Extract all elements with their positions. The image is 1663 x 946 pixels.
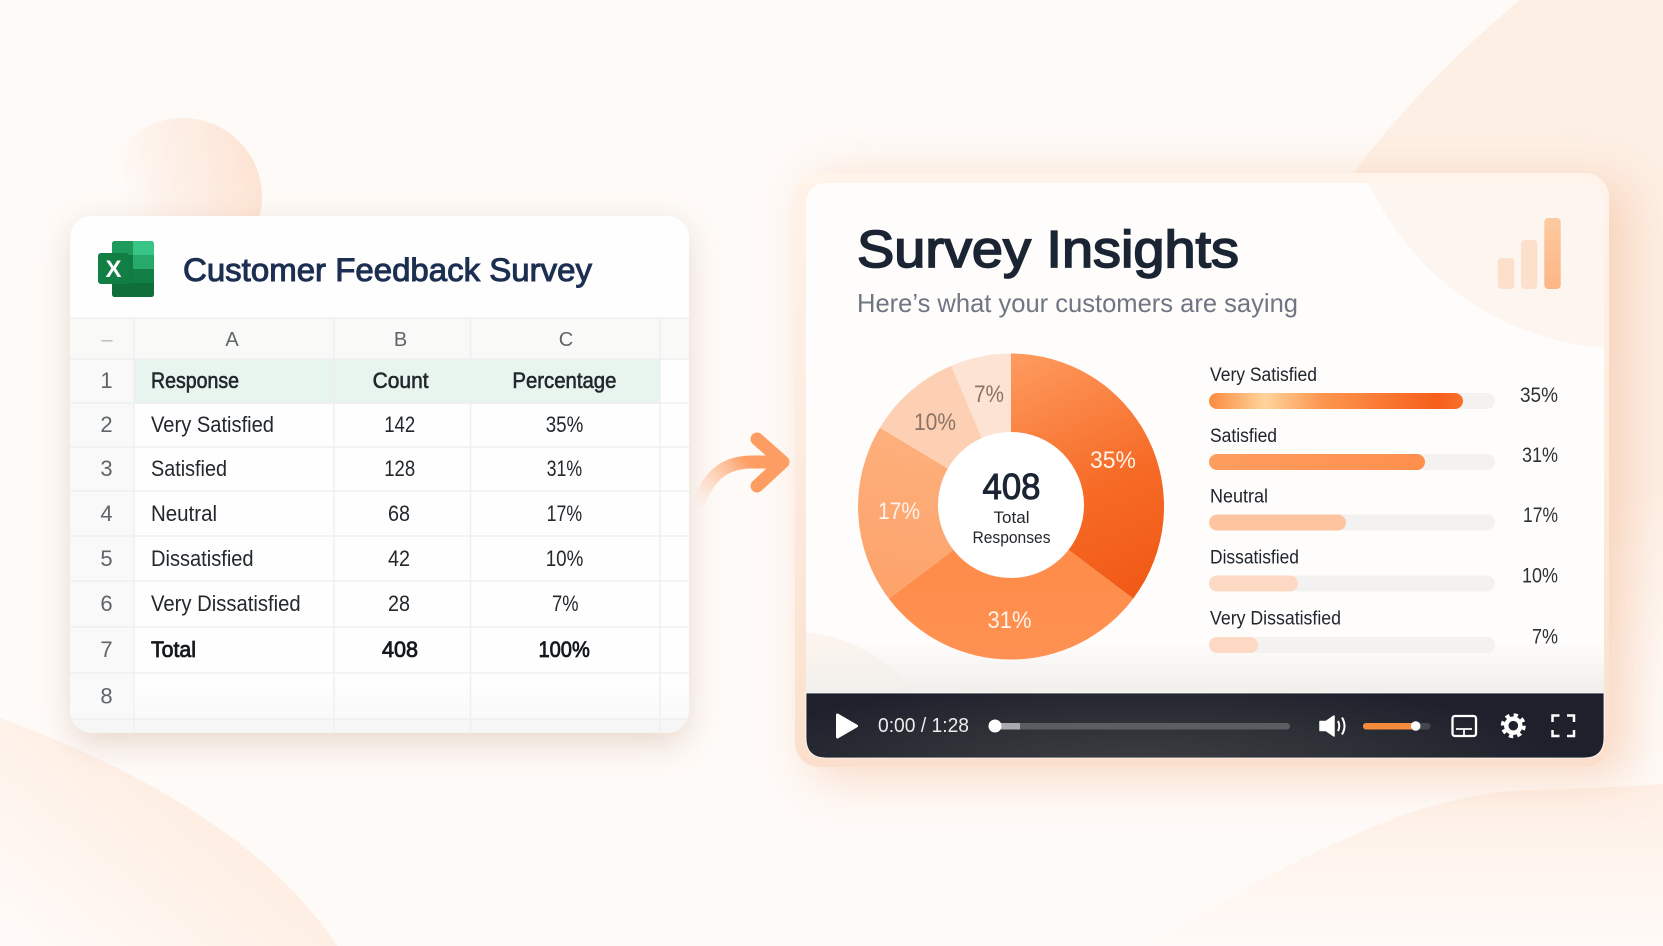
donut centre total: Total	[994, 508, 1030, 527]
row numbers: 3	[100, 456, 113, 481]
column letters: B	[394, 329, 407, 351]
table text: Total	[151, 637, 196, 662]
table text: 7%	[552, 591, 578, 616]
icon: fullscreen	[1552, 716, 1574, 736]
table text: Neutral	[151, 501, 217, 526]
row: Satisfied: 31%	[1522, 444, 1558, 467]
row numbers: 8	[100, 684, 113, 708]
row: Very Dissatisfied: Very Dissatisfied	[1210, 608, 1341, 630]
panel: spreadsheet card	[70, 216, 689, 743]
horizontal bar list	[1209, 365, 1558, 653]
panel: video player	[795, 173, 1630, 777]
row: Neutral: Neutral	[1210, 486, 1268, 508]
table text: Dissatisfied	[151, 546, 254, 571]
donut centre total	[972, 466, 1050, 547]
table grid	[70, 318, 689, 733]
row: Dissatisfied: Dissatisfied	[1210, 548, 1299, 568]
row numbers: 4	[100, 501, 113, 526]
row: Neutral: 17%	[1523, 504, 1558, 527]
icon: Excel logo	[98, 241, 154, 297]
table text: Very Dissatisfied	[151, 591, 301, 616]
table text: 10%	[546, 546, 583, 571]
icon: settings gear	[1503, 715, 1524, 736]
row numbers: 1	[100, 368, 113, 393]
column letters	[101, 329, 573, 351]
donut segment labels: 7%	[974, 381, 1004, 408]
table text: 100%	[538, 637, 590, 662]
row numbers: 5	[100, 546, 113, 571]
table text: 17%	[547, 501, 582, 526]
column letters: A	[225, 329, 239, 351]
row: Very Dissatisfied: 7%	[1532, 626, 1558, 648]
arrow	[697, 439, 783, 506]
table text: Satisfied	[151, 456, 227, 481]
donut segment labels	[878, 381, 1136, 634]
progress slider	[988, 720, 1290, 732]
row: Very Satisfied: Very Satisfied	[1210, 365, 1317, 386]
row: Very Satisfied: 35%	[1520, 384, 1558, 407]
donut chart	[858, 354, 1164, 660]
table text: Very Satisfied	[151, 412, 274, 437]
donut segment labels: 17%	[878, 498, 920, 525]
table text: Response	[151, 368, 239, 393]
table text: 68	[388, 501, 410, 526]
donut segment labels: 31%	[988, 607, 1032, 634]
donut segment labels: 10%	[914, 409, 956, 436]
table text: 31%	[547, 456, 582, 481]
icon: faded bar chart	[1498, 218, 1561, 289]
table text: 142	[384, 412, 415, 437]
row numbers: 7	[100, 637, 113, 662]
row: Satisfied: Satisfied	[1210, 426, 1277, 447]
row: Dissatisfied: 10%	[1522, 564, 1558, 588]
donut segment labels: 35%	[1090, 447, 1136, 474]
subtitle: Here’s what your customers are saying	[857, 288, 1298, 318]
heading: spreadsheet title: Customer Feedback Survey	[183, 252, 592, 288]
column letters: C	[559, 329, 573, 351]
row: Neutral	[1209, 486, 1558, 530]
table text: 42	[388, 546, 410, 571]
icon: theatre mode	[1452, 716, 1476, 736]
table text: 128	[384, 456, 415, 481]
row: Dissatisfied	[1209, 548, 1558, 592]
icon: volume	[1320, 716, 1344, 736]
heading: Survey Insights: Survey Insights	[857, 221, 1239, 279]
icon: Excel logo: X	[105, 256, 122, 283]
volume slider	[1363, 721, 1430, 731]
row: Satisfied	[1209, 426, 1558, 470]
row: Very Dissatisfied	[1209, 608, 1558, 653]
row numbers: 6	[100, 591, 113, 616]
icon: play	[838, 715, 856, 737]
table text: Count	[373, 368, 429, 393]
donut centre total: 408	[982, 466, 1040, 507]
table text: 28	[388, 591, 410, 616]
table text: 35%	[546, 412, 583, 437]
row numbers: 2	[100, 412, 113, 437]
table text: Percentage	[512, 368, 616, 393]
column letters: –	[101, 329, 113, 351]
donut centre total: Responses	[972, 528, 1050, 547]
video control bar	[806, 693, 1604, 758]
row numbers	[100, 368, 113, 708]
row: Very Satisfied	[1209, 365, 1558, 409]
table text: 408	[382, 637, 418, 662]
table text	[151, 368, 616, 662]
timestamp: 0:00 / 1:28	[878, 715, 969, 737]
